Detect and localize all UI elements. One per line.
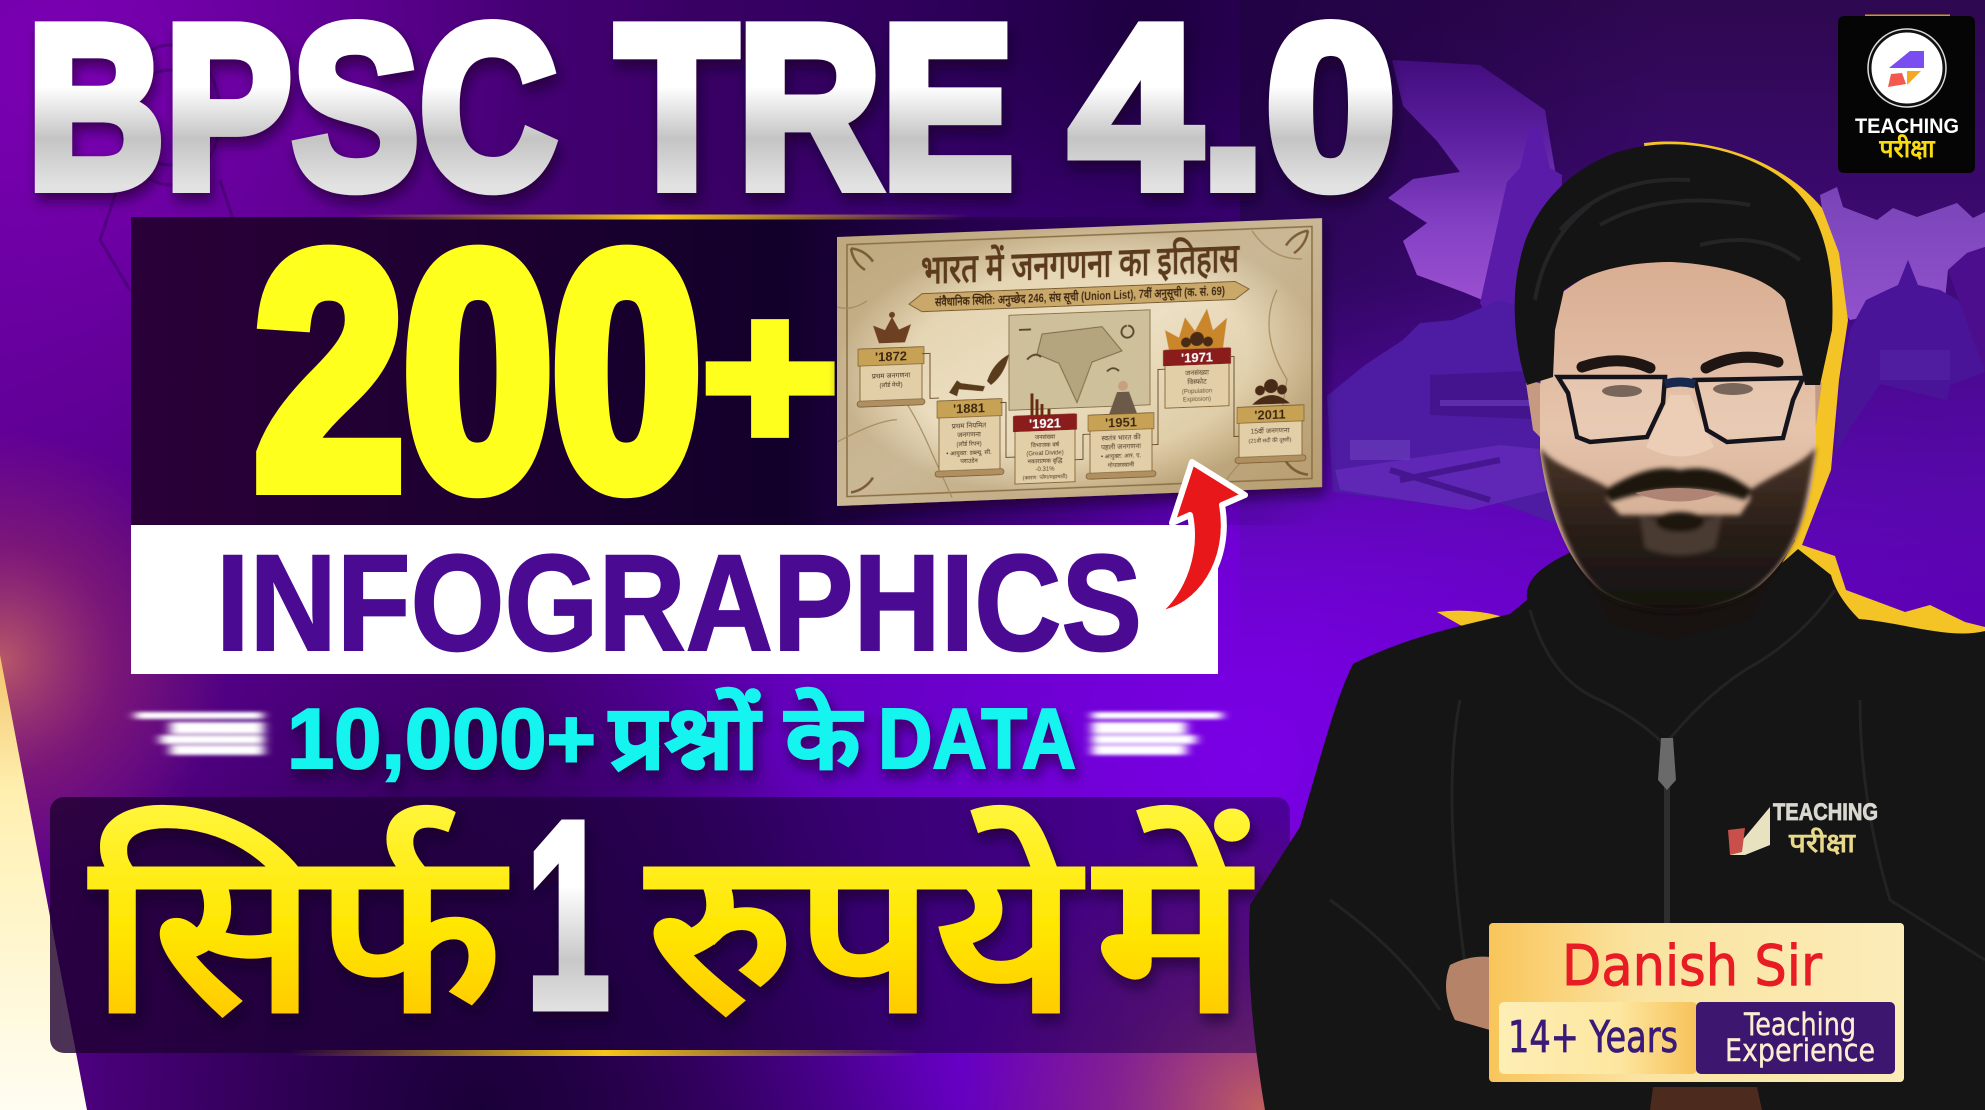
scroll 1881: प्लाउडेन bbox=[960, 456, 978, 465]
scroll 2011 with crowd: '2011 bbox=[1254, 407, 1286, 423]
left cream wedge bbox=[0, 655, 87, 1110]
heading: INFOGRAPHICS: INFOGRAPHICS bbox=[216, 527, 1142, 680]
icon: red curved arrow bbox=[1156, 462, 1245, 614]
nose bbox=[1646, 395, 1714, 456]
headline: only one rupee: सिर्फ bbox=[87, 804, 510, 1058]
eyes bbox=[1602, 383, 1753, 397]
scroll 1921: (कारण: प्लेग/महामारी) bbox=[1023, 473, 1068, 482]
big number 200+: 200 bbox=[255, 186, 701, 555]
ears bbox=[1526, 382, 1552, 445]
left hand bbox=[1446, 957, 1490, 1030]
chest logo bbox=[1728, 799, 1878, 858]
subheading: 10,000+ questions data: DATA bbox=[878, 692, 1076, 787]
panel: 200+ dark backing bbox=[131, 217, 1322, 525]
scroll 1881: • आयुक्त: डब्ल्यू. सी. bbox=[946, 448, 992, 458]
hair bbox=[1515, 144, 1833, 385]
scroll 1872: प्रथम जनगणना bbox=[872, 372, 910, 381]
face bbox=[1540, 248, 1816, 610]
yellow cut-out outline bbox=[1644, 142, 1985, 680]
card map bbox=[1009, 310, 1150, 410]
name badge bbox=[1489, 923, 1904, 1082]
scroll 1971 with population burst: जनसंख्या bbox=[1185, 368, 1209, 377]
scroll 1872 bbox=[857, 347, 925, 407]
years text: 14+ Years bbox=[1508, 1012, 1678, 1063]
glasses bbox=[1558, 377, 1803, 442]
right temple and trees bbox=[1835, 260, 1985, 455]
logo: Teaching Pariksha bbox=[1838, 14, 1975, 173]
scroll 1951: • आयुक्त: आर. ए. bbox=[1101, 453, 1141, 461]
beard bbox=[1540, 447, 1816, 613]
presenter name: Danish Sir bbox=[1562, 934, 1823, 999]
teaching experience text: Teaching bbox=[1743, 1007, 1856, 1043]
scroll 2011 with crowd: (21वीं सदी की दूसरी) bbox=[1249, 436, 1292, 445]
chest logo: परीक्षा bbox=[1788, 827, 1856, 858]
scroll 1921: जनसंख्या bbox=[1035, 433, 1056, 441]
scroll 1971 with population burst: (Population bbox=[1182, 388, 1212, 396]
icon: gavel and quill bbox=[949, 354, 1009, 397]
panel: price dark backing bbox=[50, 797, 1290, 1053]
scroll 1881: प्रथम नियमित bbox=[952, 420, 987, 431]
lower hand bbox=[1650, 1087, 1762, 1110]
headline: only one rupee bbox=[87, 767, 1255, 1064]
scroll 1881: जनगणना bbox=[957, 431, 981, 439]
chest logo: TEACHING bbox=[1773, 799, 1878, 826]
teaching pill bbox=[1696, 1002, 1895, 1074]
scroll 1971 with population burst: विस्फोट bbox=[1187, 377, 1207, 386]
scroll 1921: '1921 bbox=[1029, 415, 1061, 432]
left white streak bbox=[135, 712, 264, 755]
scroll 2011 with crowd bbox=[1235, 378, 1306, 463]
scroll 1921: -0.31% bbox=[1035, 466, 1055, 473]
scroll 1881 bbox=[935, 398, 1004, 477]
headline: only one rupee: रुपये bbox=[643, 804, 1086, 1058]
subheading: 10,000+ questions data: 10,000+ bbox=[287, 692, 596, 787]
teaching experience text: Experience bbox=[1725, 1033, 1875, 1069]
scroll 1971 with population burst: '1971 bbox=[1181, 349, 1213, 366]
Bihar map with temples bbox=[1327, 60, 1985, 525]
logo: Teaching Pariksha: परीक्षा bbox=[1878, 134, 1936, 163]
scroll 1971 with population burst bbox=[1163, 308, 1231, 408]
top gold divider bbox=[350, 214, 970, 220]
presenter photo illustration bbox=[1249, 142, 1985, 1110]
subheading: 10,000+ questions data bbox=[287, 687, 1076, 787]
scroll 1872: (लॉर्ड मेयो) bbox=[879, 380, 903, 389]
headline: only one rupee: में bbox=[1090, 804, 1255, 1058]
sample infographic card bbox=[837, 218, 1322, 506]
scroll 1881: (लॉर्ड रिपन) bbox=[956, 439, 982, 448]
scroll 1921: नकारात्मक वृद्धि bbox=[1028, 456, 1063, 466]
teaching experience text bbox=[1725, 1007, 1875, 1069]
logo: Teaching Pariksha: TEACHING bbox=[1855, 115, 1959, 138]
subheading: 10,000+ questions data: प्रश्नों के bbox=[608, 687, 864, 787]
zipper pull bbox=[1658, 738, 1676, 790]
right white streak bbox=[1092, 712, 1222, 755]
neck shadow bbox=[1570, 540, 1795, 640]
big number 200+: + bbox=[702, 257, 838, 494]
card banner: संवैधानिक स्थिति: अनुच्छेद 246, संघ सूची (Union List), 7वीं अनुसूची (क. सं. 69) bbox=[934, 283, 1225, 310]
white infographics bar bbox=[131, 525, 1218, 674]
hoodie bbox=[1249, 549, 1985, 1110]
headline: only one rupee: 1 bbox=[526, 767, 610, 1064]
faint sketch behind title bbox=[100, 45, 240, 290]
main temple tower bbox=[1480, 127, 1562, 340]
left shoulder outline bbox=[1437, 611, 1500, 640]
scroll 1951: गोपालस्वामी bbox=[1108, 460, 1135, 469]
scroll 1881: '1881 bbox=[953, 400, 985, 416]
scroll 1921: विभाजक वर्ष bbox=[1031, 440, 1060, 449]
experience pill bbox=[1499, 1002, 1697, 1074]
timeline connectors bbox=[922, 341, 1239, 466]
scroll 1872: '1872 bbox=[875, 348, 907, 365]
hoodie folds and zipper bbox=[1330, 590, 1985, 1010]
icon: crown bbox=[873, 311, 911, 344]
lips bbox=[1635, 488, 1720, 502]
card title: भारत में जनगणना का इतिहास bbox=[921, 234, 1240, 293]
scroll 1951: स्वतंत्र भारत की bbox=[1101, 432, 1141, 443]
scroll 1951: पहली जनगणना bbox=[1101, 441, 1141, 452]
scroll 1921 bbox=[1013, 392, 1077, 484]
title bbox=[27, 0, 1396, 237]
scroll 1951 bbox=[1086, 380, 1156, 479]
scroll 1971 with population burst: Explosion) bbox=[1183, 396, 1211, 404]
eyebrows bbox=[1582, 357, 1778, 368]
bottom gold divider bbox=[290, 1050, 920, 1056]
scroll 2011 with crowd: 15वीं जनगणना bbox=[1250, 425, 1290, 436]
scroll 1951: '1951 bbox=[1105, 414, 1137, 431]
scroll 1921: (Great Divide) bbox=[1026, 450, 1064, 458]
